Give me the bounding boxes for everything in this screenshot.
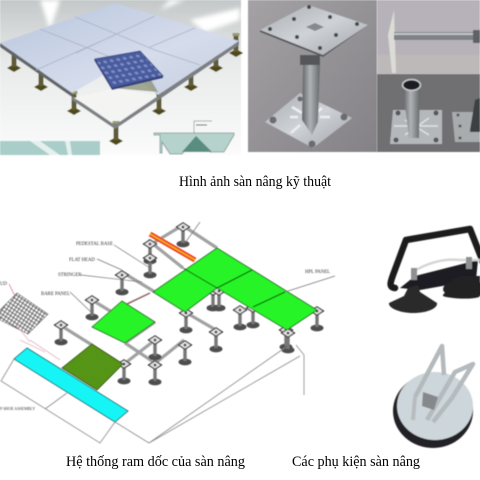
diagram labels: PEDESTAL BASE xyxy=(76,242,113,247)
perforated panel xyxy=(0,293,48,334)
photo: pedestal bases xyxy=(377,74,480,152)
diagram labels: FLAT HEAD xyxy=(69,258,95,263)
diagram labels: P SHOE ASSEMBLY xyxy=(0,406,35,411)
green HPL panels xyxy=(153,248,317,330)
diagram labels: HPL PANEL xyxy=(305,270,330,275)
photo: raised access floor render xyxy=(0,0,243,155)
orange ramp bar xyxy=(150,234,195,260)
pedestals xyxy=(54,223,324,385)
floating perforated tile xyxy=(95,51,163,88)
inset: ceiling thumbnail xyxy=(0,141,100,155)
stringers xyxy=(60,225,217,365)
inset: panel cross-section xyxy=(154,121,234,154)
leader lines xyxy=(70,222,335,313)
caption: accessories: Các phụ kiện sàn nâng xyxy=(292,454,420,470)
base plate xyxy=(265,93,352,148)
diagram: ramp system of raised floor xyxy=(0,222,335,443)
icon: double suction cup lifter xyxy=(389,229,480,313)
floor tiles xyxy=(0,3,239,129)
diagram labels xyxy=(0,242,330,411)
diagram labels: STRINGER xyxy=(58,273,82,278)
pedestals under the floor xyxy=(7,33,243,145)
photo: adjustable pedestal xyxy=(248,0,377,152)
base plate with tube xyxy=(390,80,442,144)
cyan ramp xyxy=(14,348,128,422)
caption: raised floor images: Hình ảnh sàn nâng kỹ thuật xyxy=(179,174,331,190)
photo: pedestal side view xyxy=(377,0,480,74)
icon: single suction cup lifter xyxy=(393,346,473,448)
post xyxy=(302,65,320,135)
second base plate xyxy=(452,98,480,142)
caption: ramp system: Hệ thống ram dốc của sàn nâng xyxy=(66,454,245,470)
diagram labels: UD xyxy=(0,282,7,287)
green bare panel xyxy=(92,301,155,343)
top plate xyxy=(260,5,368,57)
dark green grid panel xyxy=(62,344,123,390)
dimension lines xyxy=(1,284,304,443)
diagram labels: BARE PANEL xyxy=(41,292,70,297)
